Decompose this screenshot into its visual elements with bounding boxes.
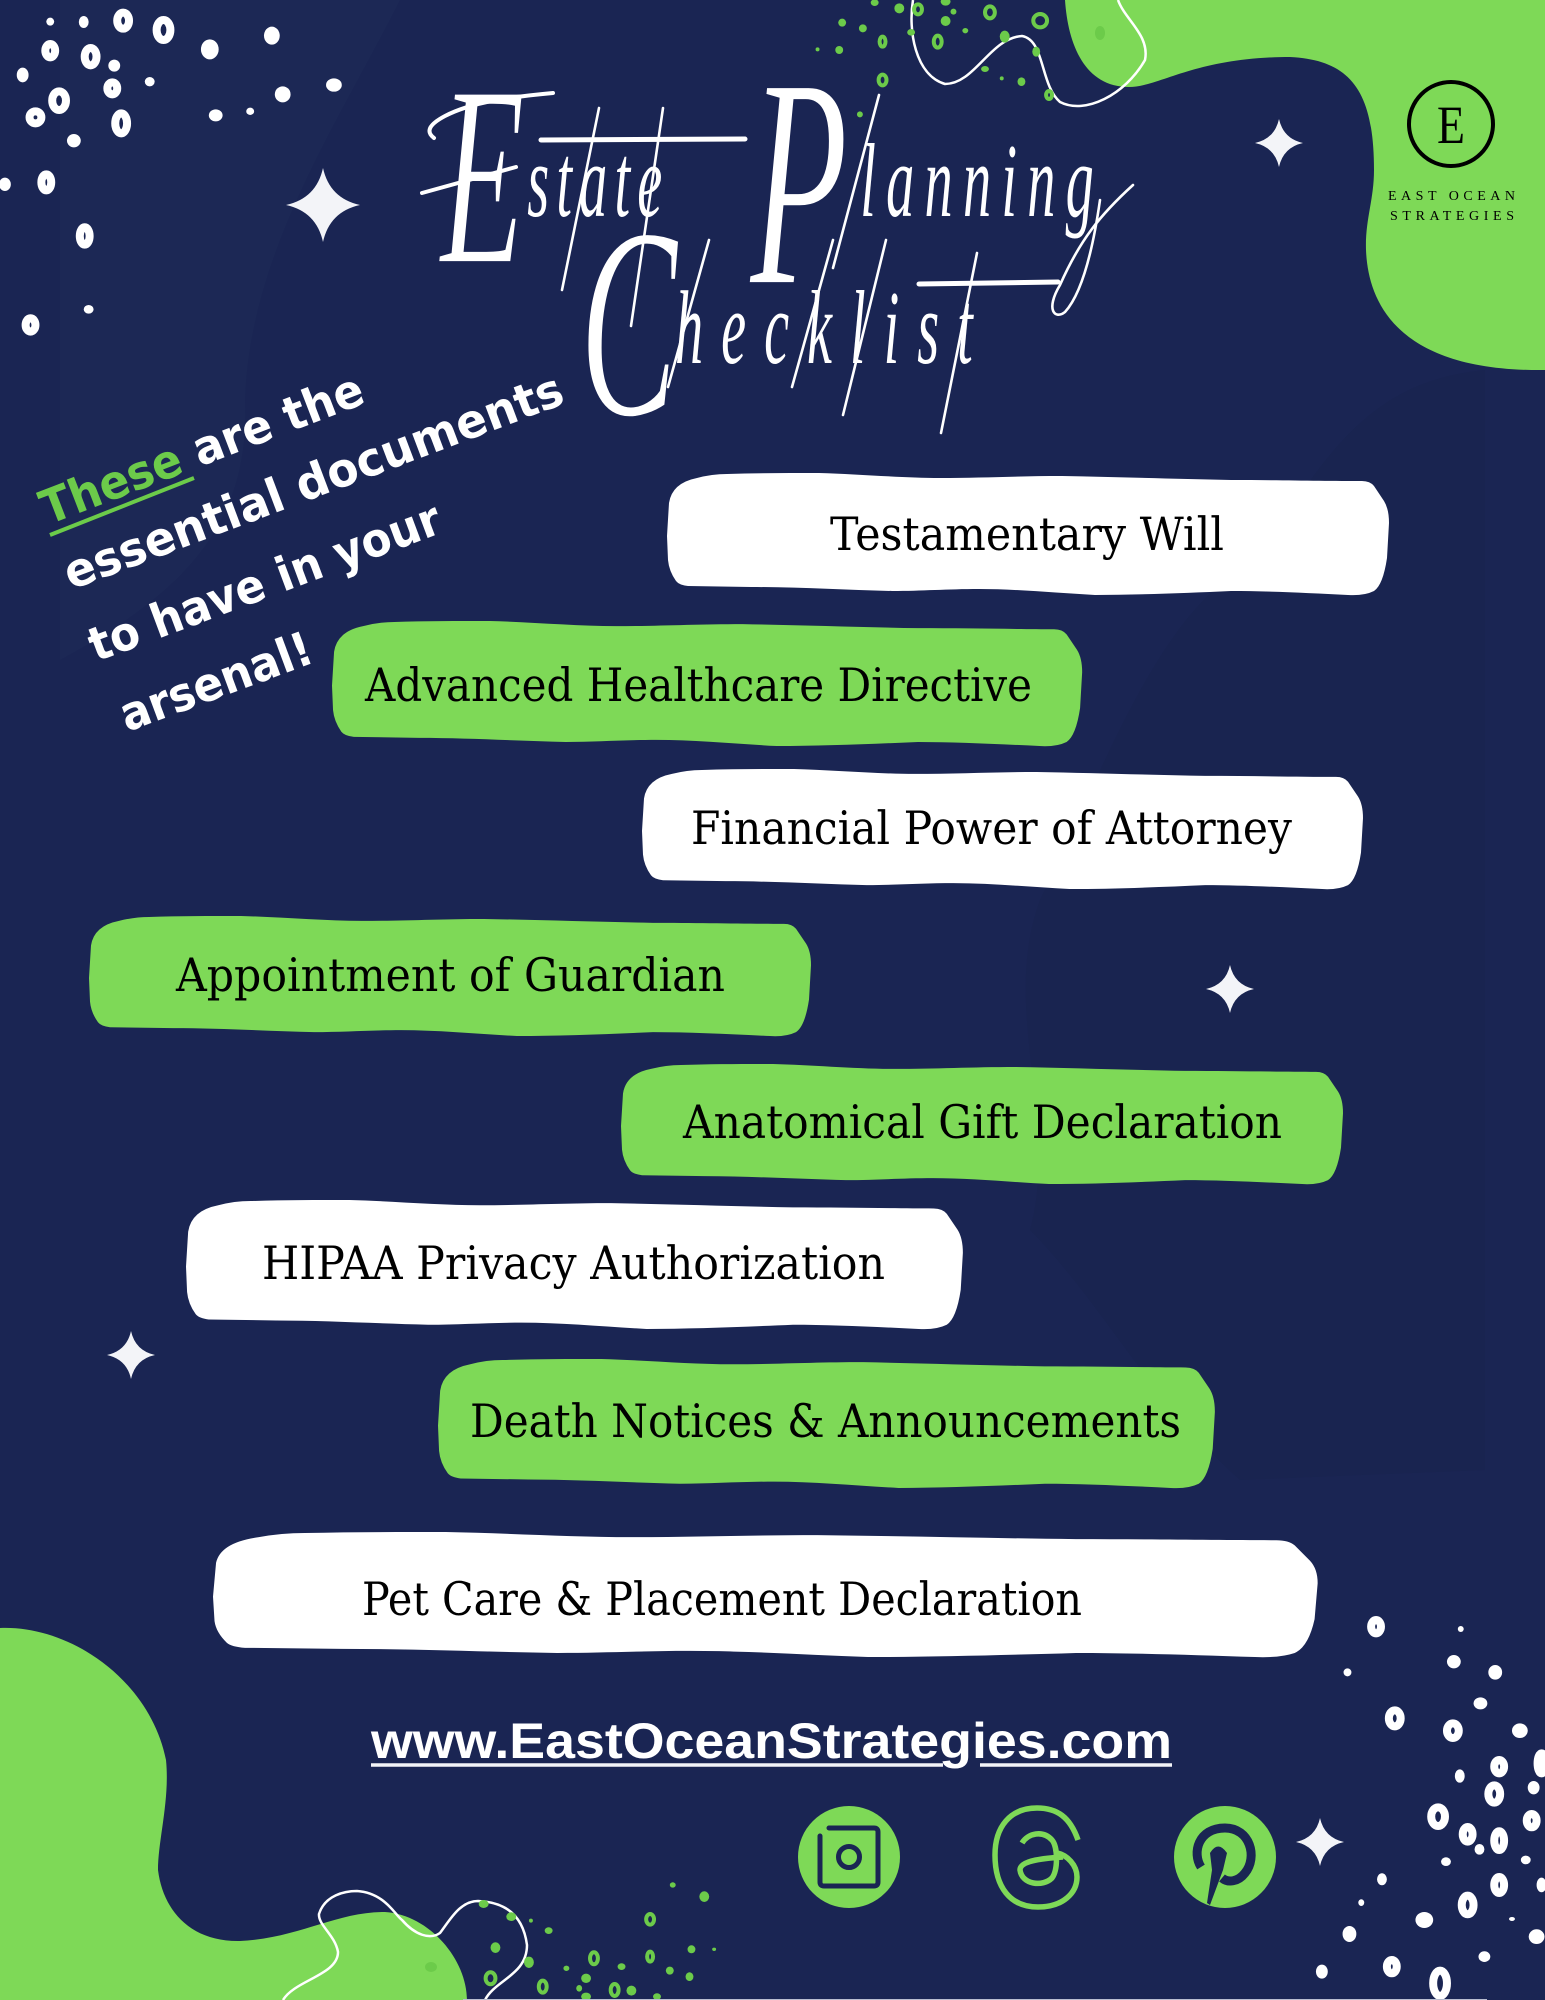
banner: Financial Power of Attorney: Financial Power of Attorney	[691, 801, 1292, 855]
website link: www.EastOceanStrategies.com	[370, 1713, 1172, 1769]
title line: Checklist: C	[580, 173, 679, 475]
title line: Estate Planning	[438, 16, 1104, 348]
logo name line 2: STRATEGIES	[1390, 209, 1514, 224]
logo ring	[1409, 82, 1493, 166]
banner: Pet Care and Placement Declaration: Pet Care & Placement Declaration	[362, 1572, 1082, 1626]
dots: top green	[816, 0, 1052, 117]
sparkle: middle right	[1206, 965, 1254, 1013]
sparkle: bottom right	[1296, 1818, 1344, 1866]
dots: bottom green	[479, 1882, 716, 2000]
banner: Anatomical Gift Declaration	[621, 1064, 1343, 1184]
bottom edge line	[463, 1999, 1487, 2000]
tilted intro text	[33, 362, 571, 743]
line 2: essential documents	[56, 362, 571, 601]
title	[422, 16, 1133, 475]
title line: Estate Planning: P	[749, 16, 848, 348]
title line: Estate Planning: lanning	[860, 124, 1104, 240]
banner: HIPAA Privacy Authorization: HIPAA Privacy Authorization	[262, 1236, 885, 1290]
banner: Advanced Healthcare Directive: Advanced Healthcare Directive	[364, 658, 1032, 712]
underline: These	[50, 478, 194, 535]
squiggle: top	[912, 0, 1146, 106]
banner: Death Notices and Announcements	[438, 1359, 1215, 1488]
dots: bottom right white	[1316, 1620, 1545, 1996]
banner: Testamentary Will	[667, 473, 1389, 595]
icon: threads	[995, 1808, 1078, 1907]
banner: Appointment of Guardian: Appointment of Guardian	[175, 948, 725, 1002]
logo name line 1: EAST OCEAN	[1388, 189, 1515, 204]
banner: Advanced Healthcare Directive	[332, 621, 1082, 746]
squiggle: bottom	[283, 1891, 527, 2000]
logo	[1388, 82, 1515, 224]
blob: top right green	[1065, 0, 1545, 370]
title line: Estate Planning: state	[527, 124, 691, 240]
banner: Testamentary Will: Testamentary Will	[830, 507, 1224, 561]
line 4: arsenal!	[112, 621, 321, 743]
icon: instagram	[798, 1806, 900, 1908]
banner: Anatomical Gift Declaration: Anatomical Gift Declaration	[682, 1095, 1282, 1149]
dots: top left white	[0, 13, 342, 332]
icon: pinterest	[1174, 1806, 1276, 1908]
banner: Pet Care and Placement Declaration	[213, 1532, 1318, 1657]
sparkle: middle left	[107, 1331, 155, 1379]
title line: Checklist	[580, 173, 991, 475]
title swashes	[422, 93, 1133, 433]
logo letter: E	[1437, 95, 1465, 155]
banner: HIPAA Privacy Authorization	[186, 1200, 963, 1329]
sparkle: title left	[286, 168, 360, 242]
sparkle: title right	[1255, 119, 1303, 167]
blob dots	[425, 26, 1105, 1972]
banner: Financial Power of Attorney	[642, 769, 1363, 889]
blob: bottom left green	[0, 1628, 467, 2000]
line 3: to have in your	[81, 491, 449, 673]
title line: Estate Planning: E	[438, 33, 525, 318]
banner: Death Notices and Announcements: Death Notices & Announcements	[470, 1394, 1181, 1448]
banner: Appointment of Guardian	[89, 916, 811, 1036]
line 1: These are the	[33, 362, 372, 536]
title line: Checklist: hecklist	[675, 271, 991, 387]
